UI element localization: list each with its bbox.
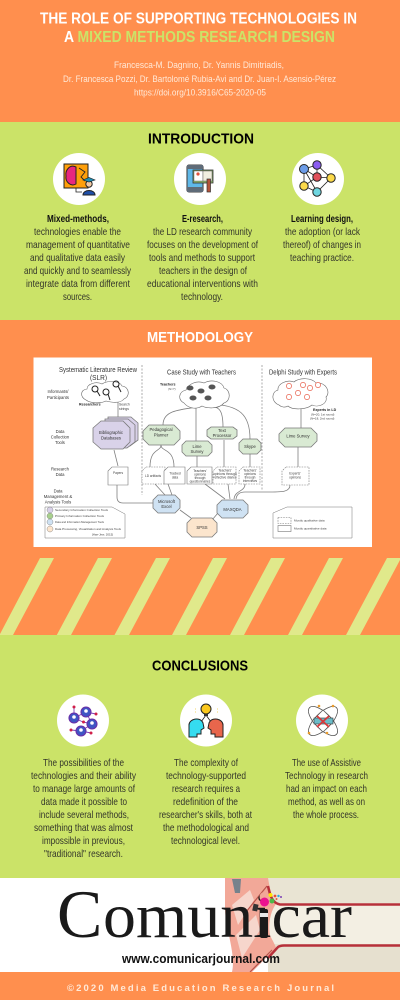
text block: learning design bbox=[283, 213, 361, 264]
row labels: Management & bbox=[44, 494, 72, 499]
research data documents: Teachers' bbox=[193, 469, 207, 473]
row labels: Data bbox=[56, 472, 65, 477]
cloud: teachers: (N=?) bbox=[168, 387, 176, 391]
text block: conclusion one: to manage large amounts of bbox=[33, 783, 135, 795]
row labels: Collection bbox=[51, 434, 70, 440]
text block: learning design: Learning design, bbox=[291, 213, 353, 225]
node: spss: SPSS bbox=[196, 525, 208, 530]
text block: conclusion two: redefinition of the bbox=[173, 796, 238, 808]
research data documents: Tracked bbox=[169, 472, 181, 476]
node: maxqda: MAXQDA bbox=[223, 507, 242, 512]
authors and DOI: https://doi.org/10.3916/C65-2020-05 bbox=[134, 88, 266, 98]
text block: conclusion three: Technology in research bbox=[285, 770, 368, 782]
node: lime survey (teachers) bbox=[182, 441, 212, 456]
panel: methodology background bbox=[0, 320, 400, 635]
column titles: Delphi Study with Experts bbox=[269, 370, 337, 376]
text block: conclusion two: technology-supported bbox=[166, 770, 246, 782]
node: skype: Skype bbox=[244, 444, 256, 449]
text block: conclusion one: impossible in previous, bbox=[42, 835, 125, 847]
text block: conclusion two: technological level. bbox=[171, 835, 240, 847]
text block: e-research: technology. bbox=[181, 291, 223, 303]
logo: Comunicar: C bbox=[57, 876, 102, 952]
text block: e-research bbox=[147, 213, 258, 303]
research data documents: opinions through bbox=[213, 472, 237, 476]
node: bibliographic databases: Bibliographic bbox=[99, 430, 123, 435]
icon: atom with tools bbox=[296, 694, 348, 746]
node: microsoft excel bbox=[153, 495, 180, 513]
legend: tool types bbox=[45, 507, 125, 538]
legend: data types: Mostly qualitative data bbox=[294, 518, 325, 522]
text block: conclusion three: The use of Assistive bbox=[292, 757, 361, 769]
node: pedagogical planner: Pedagogical bbox=[149, 427, 173, 432]
icon: brain and graduate bbox=[53, 153, 105, 205]
legend: tool types: [Hae-Jew, 2015] bbox=[92, 532, 113, 536]
node: text processor: Text bbox=[218, 428, 227, 433]
row labels: Data bbox=[54, 488, 63, 494]
icon: network nodes bbox=[292, 153, 344, 205]
node: bibliographic databases bbox=[93, 417, 138, 449]
cloud: researchers: Search bbox=[119, 402, 130, 406]
text block: learning design: the adoption (or lack bbox=[285, 226, 361, 238]
row labels: Tools bbox=[55, 440, 65, 445]
heading: introduction: INTRODUCTION bbox=[148, 130, 254, 148]
authors and DOI: Dr. Francesca Pozzi, Dr. Bartolomé Rubia-Avi and Dr. Juan-I. Asensio-Pérez bbox=[63, 74, 336, 85]
research data documents: reflective diaries bbox=[213, 476, 237, 480]
node: pedagogical planner: Planner bbox=[154, 432, 169, 438]
text block: conclusion one: "traditional" research. bbox=[44, 848, 123, 860]
research data documents: interviews bbox=[243, 479, 257, 483]
text block: mixed-methods: management of quantitative bbox=[26, 239, 130, 251]
column titles: Systematic Literature Review bbox=[59, 367, 138, 374]
research data documents: Teachers' bbox=[218, 468, 232, 472]
heading: conclusions: CONCLUSIONS bbox=[152, 658, 248, 674]
legend: tool types: Data Processing, Visualization and Analysis Tools bbox=[55, 527, 121, 531]
research data documents: questionnaires bbox=[190, 480, 211, 484]
legend: tool types: Secondary Information Collection Tools bbox=[55, 508, 108, 512]
text block: conclusion one: data made it possible to bbox=[41, 796, 127, 808]
text block: learning design: thereof) of changes in bbox=[283, 239, 361, 251]
text block: e-research: the LD research community bbox=[153, 226, 253, 238]
cloud: teachers bbox=[160, 381, 229, 408]
authors and DOI: Francesca-M. Dagnino, Dr. Yannis Dimitriadis, bbox=[114, 60, 284, 71]
node: skype bbox=[239, 439, 261, 454]
title bbox=[40, 10, 357, 46]
column titles: Case Study with Teachers bbox=[167, 370, 236, 376]
row labels: Data bbox=[56, 429, 65, 434]
research data documents: through bbox=[195, 476, 206, 480]
cloud: researchers: Researchers bbox=[79, 402, 101, 406]
panel: journal banner bbox=[0, 876, 400, 972]
text block: conclusion two: researcher's skills, both at bbox=[159, 809, 252, 821]
node: text processor: Processor bbox=[213, 433, 232, 438]
node: lime survey (experts): Lime Survey bbox=[286, 434, 311, 438]
cloud: researchers: strings bbox=[119, 407, 129, 411]
text block: mixed-methods: technologies enable the bbox=[34, 226, 121, 238]
cloud: experts: (N=18, 2nd round) bbox=[310, 416, 334, 420]
panel: header bbox=[0, 0, 400, 122]
text block: conclusion one bbox=[31, 757, 137, 860]
research data documents: LD artifacts bbox=[145, 474, 161, 478]
cloud: teachers: Teachers bbox=[160, 382, 176, 386]
node: maxqda bbox=[217, 500, 248, 518]
panel: conclusions background bbox=[0, 635, 400, 878]
icon: tablet and book bbox=[174, 153, 226, 205]
text block: e-research: E-research, bbox=[182, 213, 223, 225]
row labels: Informants/ bbox=[48, 389, 69, 394]
research data documents bbox=[142, 467, 309, 485]
text block: mixed-methods bbox=[24, 213, 132, 303]
diagonal stripes bbox=[0, 558, 400, 635]
text block: conclusion three bbox=[285, 757, 368, 821]
text block: conclusion three: method, as well as on bbox=[288, 796, 365, 808]
text block: conclusion two: research requires a bbox=[172, 783, 240, 795]
text block: mixed-methods: sources. bbox=[63, 291, 92, 303]
text block: conclusion one: The possibilities of the bbox=[43, 757, 124, 769]
cloud: researchers bbox=[79, 381, 130, 411]
research data documents: opinions bbox=[244, 472, 256, 476]
text block: e-research: educational interventions with bbox=[147, 278, 258, 290]
text block: conclusion two bbox=[159, 757, 252, 847]
node: lime survey (teachers): Survey bbox=[190, 449, 204, 454]
photo: stack of books bbox=[225, 878, 400, 972]
node: microsoft excel: Excel bbox=[161, 504, 172, 509]
text block: mixed-methods: and qualitative data easily bbox=[30, 252, 126, 264]
website url: www.comunicarjournal.com bbox=[121, 952, 280, 966]
research data documents: through bbox=[245, 476, 256, 480]
research data documents: opinions bbox=[289, 476, 301, 480]
text block: e-research: teachers in the design of bbox=[159, 265, 247, 277]
text block: mixed-methods: Mixed-methods, bbox=[47, 213, 109, 225]
node: lime survey (teachers): Lime bbox=[192, 444, 202, 449]
cloud: experts: Experts in LD bbox=[313, 408, 337, 412]
text block: mixed-methods: and quickly and to seamlessly bbox=[24, 265, 132, 277]
row labels bbox=[44, 389, 72, 504]
panel: introduction background bbox=[0, 122, 400, 320]
document: papers: Papers bbox=[113, 471, 123, 475]
text block: learning design: teaching practice. bbox=[290, 252, 354, 264]
legend: data types: Mostly quantitative data bbox=[294, 526, 327, 530]
icon: two heads and lightbulb bbox=[180, 694, 232, 746]
text block: conclusion three: the whole process. bbox=[293, 809, 359, 821]
node: microsoft excel: Microsoft bbox=[158, 499, 176, 504]
research data documents: Teachers' bbox=[243, 468, 257, 472]
legend: tool types: Data and Information Management Tools bbox=[55, 520, 104, 524]
text block: conclusion two: The complexity of bbox=[174, 757, 238, 769]
document: papers bbox=[108, 467, 128, 485]
node: lime survey (experts) bbox=[279, 428, 317, 447]
row labels: Research bbox=[51, 466, 70, 472]
title: A MIXED METHODS RESEARCH DESIGN bbox=[64, 29, 335, 46]
text block: conclusion one: technologies and their ability bbox=[31, 770, 137, 782]
text block: conclusion three: had an impact on each bbox=[286, 783, 367, 795]
research data documents: Experts' bbox=[289, 472, 301, 476]
connector arrows bbox=[114, 402, 301, 520]
chart: research design flow diagram bbox=[34, 358, 372, 547]
column titles: (SLR) bbox=[90, 375, 107, 382]
cloud: experts bbox=[273, 379, 337, 420]
panel: footer bbox=[0, 972, 400, 1000]
text block: conclusion two: the methodological and bbox=[163, 822, 249, 834]
node: spss bbox=[187, 518, 217, 537]
text block: e-research: tools and methods to support bbox=[149, 252, 255, 264]
research data documents: data bbox=[172, 476, 178, 480]
icon: connected people bbox=[57, 694, 109, 746]
column titles bbox=[59, 367, 337, 382]
node: pedagogical planner bbox=[143, 425, 180, 445]
text block: conclusion one: include several methods, bbox=[39, 809, 129, 821]
text block: conclusion one: something that was almost bbox=[34, 822, 133, 834]
node: bibliographic databases: Databases bbox=[101, 436, 121, 440]
heading: methodology: METHODOLOGY bbox=[147, 329, 253, 346]
text block: e-research: focuses on the development of bbox=[147, 239, 258, 251]
copyright: ©2020 Media Education Research Journal bbox=[67, 983, 334, 994]
legend: data types bbox=[273, 507, 352, 538]
node: text processor bbox=[207, 427, 237, 439]
title: THE ROLE OF SUPPORTING TECHNOLOGIES IN bbox=[40, 10, 357, 28]
authors and DOI bbox=[63, 60, 336, 98]
text block: mixed-methods: integrate data from different bbox=[26, 278, 130, 290]
row labels: Participants bbox=[47, 395, 69, 400]
cloud: experts: (N=20, 1st round) bbox=[311, 412, 334, 416]
row labels: Analysis Tools bbox=[45, 500, 71, 504]
logo: Comunicar: omunicar bbox=[103, 881, 352, 951]
legend: tool types: Primary Information Collection Tools bbox=[55, 514, 104, 518]
research data documents: opinions bbox=[194, 472, 206, 476]
